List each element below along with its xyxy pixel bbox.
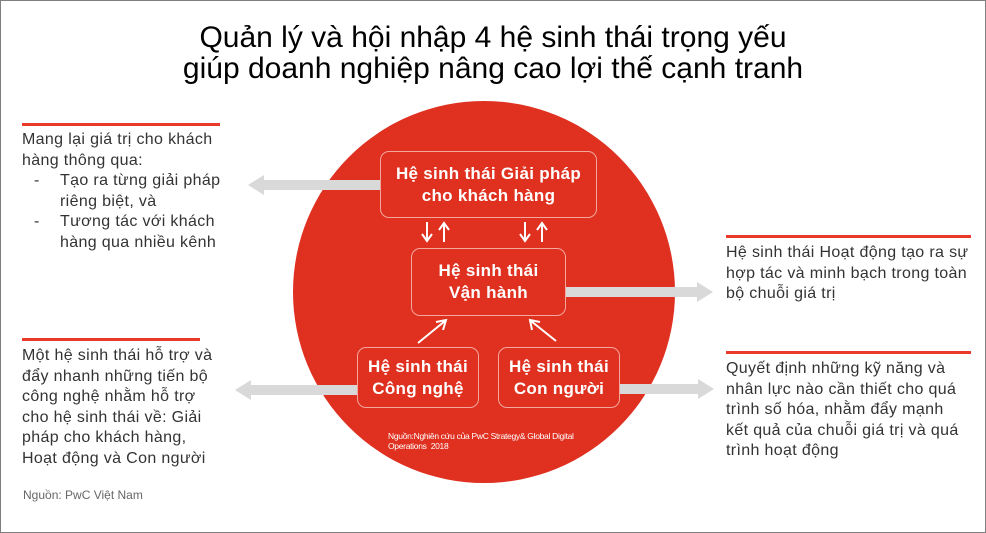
text: technology: Một hệ sinh thái hỗ trợ và xyxy=(22,347,212,364)
text: people: trình số hóa, nhằm đẩy mạnh xyxy=(726,401,944,418)
title xyxy=(183,21,803,85)
text: people: kết quả của chuỗi giá trị và quá xyxy=(726,422,959,438)
box: customer solutions xyxy=(380,151,597,218)
text: people xyxy=(726,351,971,459)
box: technology: Hệ sinh thái xyxy=(368,356,468,376)
box: operations xyxy=(411,248,566,316)
text: technology xyxy=(22,338,212,466)
title: Quản lý và hội nhập 4 hệ sinh thái trọng yếu xyxy=(199,21,787,54)
text: operations: Hệ sinh thái Hoạt động tạo ra sự xyxy=(726,244,968,261)
circle source note: Nguồn:Nghiên cứu của PwC Strategy& Global Digital Operations 2018 xyxy=(388,431,574,451)
arrow: to customer solutions text xyxy=(248,175,380,195)
text: customer value: Mang lại giá trị cho khách xyxy=(22,131,213,148)
box: technology: Công nghệ xyxy=(372,378,464,398)
text: customer value: hàng thông qua: xyxy=(22,152,143,168)
text: technology: Hoạt động và Con người xyxy=(22,450,206,466)
arrow: to technology text xyxy=(235,380,357,400)
text: technology: pháp cho khách hàng, xyxy=(22,429,186,446)
text: people: trình hoạt động xyxy=(726,442,839,459)
box: customer solutions: cho khách hàng xyxy=(422,186,555,204)
text: customer value xyxy=(22,123,220,250)
text: technology: cho hệ sinh thái về: Giải xyxy=(22,408,202,426)
box: people: Con người xyxy=(514,378,604,398)
text: operations: bộ chuỗi giá trị xyxy=(726,285,836,302)
box: operations: Hệ sinh thái xyxy=(439,261,538,280)
text: operations xyxy=(726,235,971,302)
red circle xyxy=(293,101,675,483)
arrow: to operations text xyxy=(566,282,713,302)
text: customer value: riêng biệt, và xyxy=(60,192,157,210)
arrow: to people text xyxy=(620,379,714,399)
text: customer value: - xyxy=(34,172,40,189)
text: technology: công nghệ nhằm hỗ trợ xyxy=(22,388,196,405)
text: people: nhân lực nào cần thiết cho quá xyxy=(726,380,956,398)
text: people: Quyết định những kỹ năng và xyxy=(726,360,945,377)
text: customer value: Tương tác với khách xyxy=(60,213,215,230)
text: customer value: - xyxy=(34,213,40,230)
box: customer solutions: Hệ sinh thái Giải pháp xyxy=(396,164,581,182)
text: customer value: Tạo ra từng giải pháp xyxy=(60,172,220,189)
text: technology: đẩy nhanh những tiến bộ xyxy=(22,368,208,384)
text: operations: hợp tác và minh bạch trong toàn xyxy=(726,264,967,282)
title: giúp doanh nghiệp nâng cao lợi thế cạnh tranh xyxy=(183,52,803,85)
arrows: vertical pairs xyxy=(418,222,556,343)
box: operations: Vận hành xyxy=(449,283,528,302)
source: Nguồn: PwC Việt Nam xyxy=(23,488,143,502)
box: people xyxy=(498,347,620,408)
box: technology xyxy=(357,347,479,408)
text: customer value: hàng qua nhiều kênh xyxy=(60,234,216,250)
box: people: Hệ sinh thái xyxy=(509,356,609,376)
